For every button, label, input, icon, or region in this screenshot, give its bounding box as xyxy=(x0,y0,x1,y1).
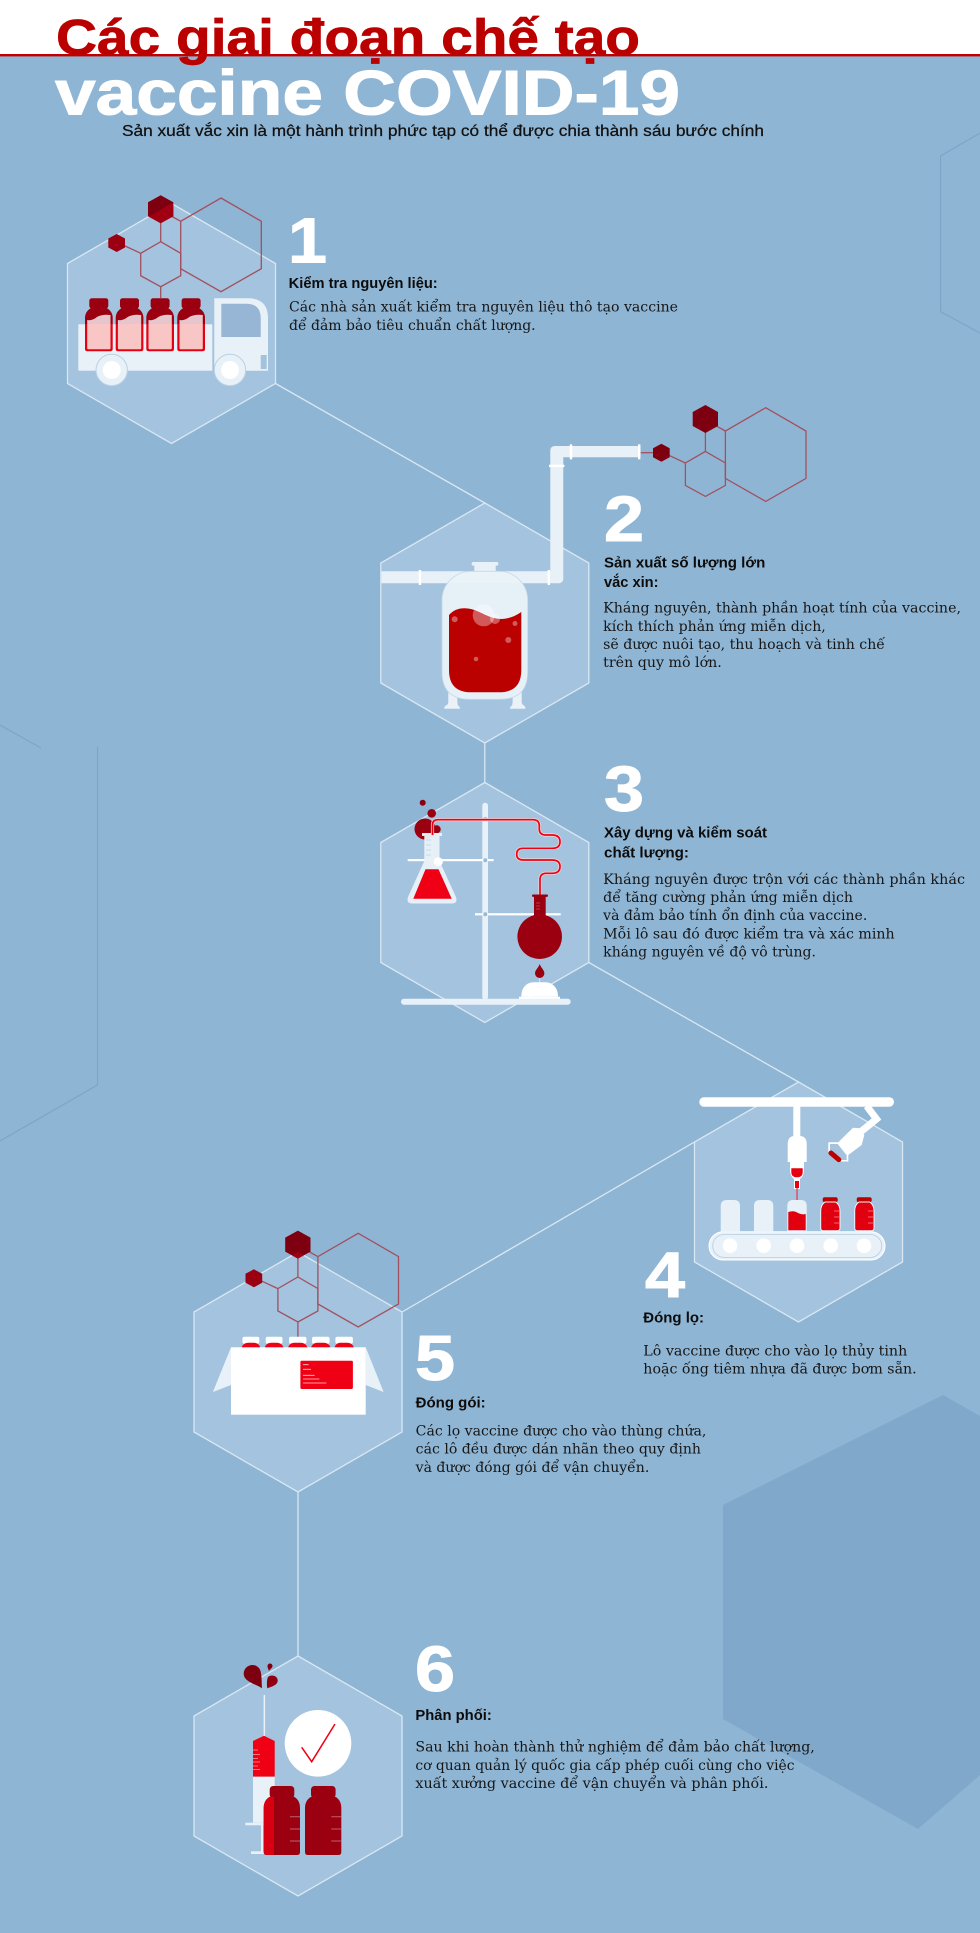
decorative background hexagon, bottom right xyxy=(723,1395,980,1829)
hexagon 2 xyxy=(381,503,589,743)
body text 3: Kháng nguyên được trộn với các thành phần khác xyxy=(603,872,965,888)
body text 1: để đảm bảo tiêu chuẩn chất lượng. xyxy=(289,318,536,334)
icon: check circle xyxy=(285,1710,351,1777)
step number 5: 5 xyxy=(415,1322,455,1394)
icon: splash drops xyxy=(244,1664,278,1688)
step number 1: 1 xyxy=(288,204,327,276)
panel: step 4 xyxy=(643,1082,917,1378)
icon: molecule 2 xyxy=(641,405,806,501)
hexagon 4 xyxy=(694,1082,902,1322)
body text 6: Sau khi hoàn thành thử nghiệm để đảm bảo chất lượng, xyxy=(415,1740,815,1756)
body text 2: sẽ được nuôi tạo, thu hoạch và tinh chế xyxy=(603,637,886,653)
body text 1: Các nhà sản xuất kiểm tra nguyên liệu thô tạo vaccine xyxy=(289,300,678,316)
heading 6: Phân phối: xyxy=(415,1708,492,1724)
icon: round flask xyxy=(517,894,562,959)
header white band xyxy=(0,0,980,54)
body text 6: xuất xưởng vaccine để vận chuyển và phân phối. xyxy=(415,1776,768,1792)
icon: vials on conveyor xyxy=(721,1197,874,1232)
title line 2: vaccine COVID-19 xyxy=(55,58,680,128)
icon: final bottles xyxy=(264,1786,341,1855)
body text 5: các lô đều được dán nhãn theo quy định xyxy=(416,1442,701,1458)
body text 6 xyxy=(415,1740,815,1792)
hexagon 6 xyxy=(194,1656,402,1896)
body text 3 xyxy=(602,872,965,960)
body text 4 xyxy=(643,1344,917,1378)
body text 2: trên quy mô lớn. xyxy=(603,655,722,671)
panel: step 1 xyxy=(68,195,678,444)
decorative outline hexagon, left xyxy=(0,725,98,1141)
heading 1: Kiểm tra nguyên liệu: xyxy=(289,276,438,292)
icon: conical flask xyxy=(408,800,456,904)
hexagon 5 xyxy=(194,1252,402,1492)
heading 2: vắc xin: xyxy=(604,573,658,591)
body text 2 xyxy=(603,601,961,671)
body text 3: Mỗi lô sau đó được kiểm tra và xác minh xyxy=(603,926,895,942)
icon: molecule 5 xyxy=(246,1231,398,1337)
subtitle: Sản xuất vắc xin là một hành trình phức tạp có thể được chia thành sáu bước chính xyxy=(122,123,764,140)
heading 3: chất lượng: xyxy=(604,846,689,862)
body text 2: Kháng nguyên, thành phần hoạt tính của vaccine, xyxy=(603,601,961,617)
icon: box of vials xyxy=(213,1337,384,1415)
body text 4: hoặc ống tiêm nhựa đã được bơm sẵn. xyxy=(643,1362,917,1378)
body text 2: kích thích phản ứng miễn dịch, xyxy=(603,619,826,635)
panel: step 6 xyxy=(194,1633,815,1896)
icon: truck with bottles xyxy=(78,298,268,386)
icon: syringe xyxy=(245,1695,282,1854)
body text 3: và đảm bảo tính ổn định của vaccine. xyxy=(602,908,867,924)
panel: step 3 xyxy=(381,753,965,1022)
heading 3: Xây dựng và kiểm soát xyxy=(604,826,767,842)
title line 1: Các giai đoạn chế tạo xyxy=(56,10,640,66)
step number 4: 4 xyxy=(645,1239,685,1311)
body text 5: và được đóng gói để vận chuyển. xyxy=(415,1460,649,1476)
icon: molecule 1 xyxy=(108,195,261,298)
body text 5 xyxy=(415,1424,706,1476)
heading 5: Đóng gói: xyxy=(416,1396,486,1412)
body text 5: Các lọ vaccine được cho vào thùng chứa, xyxy=(416,1424,706,1440)
hexagon 3 xyxy=(381,782,589,1022)
body text 3: để tăng cường phản ứng miễn dịch xyxy=(603,890,853,906)
step number 2: 2 xyxy=(604,483,644,555)
header red rule xyxy=(0,54,980,56)
heading 4: Đóng lọ: xyxy=(643,1310,704,1326)
body text 1 xyxy=(289,300,678,334)
icon: lab stand xyxy=(401,803,571,1005)
icon: conveyor xyxy=(709,1232,885,1260)
title xyxy=(55,10,680,128)
icon: red tube xyxy=(432,820,560,895)
icon: tank xyxy=(442,562,528,709)
step number 3: 3 xyxy=(604,753,644,825)
connector lines between steps xyxy=(276,384,798,1656)
body text 4: Lô vaccine được cho vào lọ thủy tinh xyxy=(643,1344,908,1360)
panel: step 5 xyxy=(194,1231,706,1492)
heading 2: Sản xuất số lượng lớn xyxy=(604,555,765,571)
icon: drop and burner xyxy=(519,964,560,999)
body text 6: cơ quan quản lý quốc gia cấp phép cuối cùng cho việc xyxy=(415,1758,794,1774)
hexagon 1 xyxy=(68,204,276,444)
icon: pipe xyxy=(382,444,640,585)
body text 3: kháng nguyên về độ vô trùng. xyxy=(603,944,816,960)
heading 2 xyxy=(604,555,765,591)
panel: step 2 xyxy=(381,405,961,743)
icon: filling machine xyxy=(699,1097,894,1212)
decorative outline hexagon, top right xyxy=(941,133,980,333)
icon: robot arm camera xyxy=(828,1106,876,1162)
heading 3 xyxy=(604,826,767,862)
step number 6: 6 xyxy=(415,1633,455,1705)
